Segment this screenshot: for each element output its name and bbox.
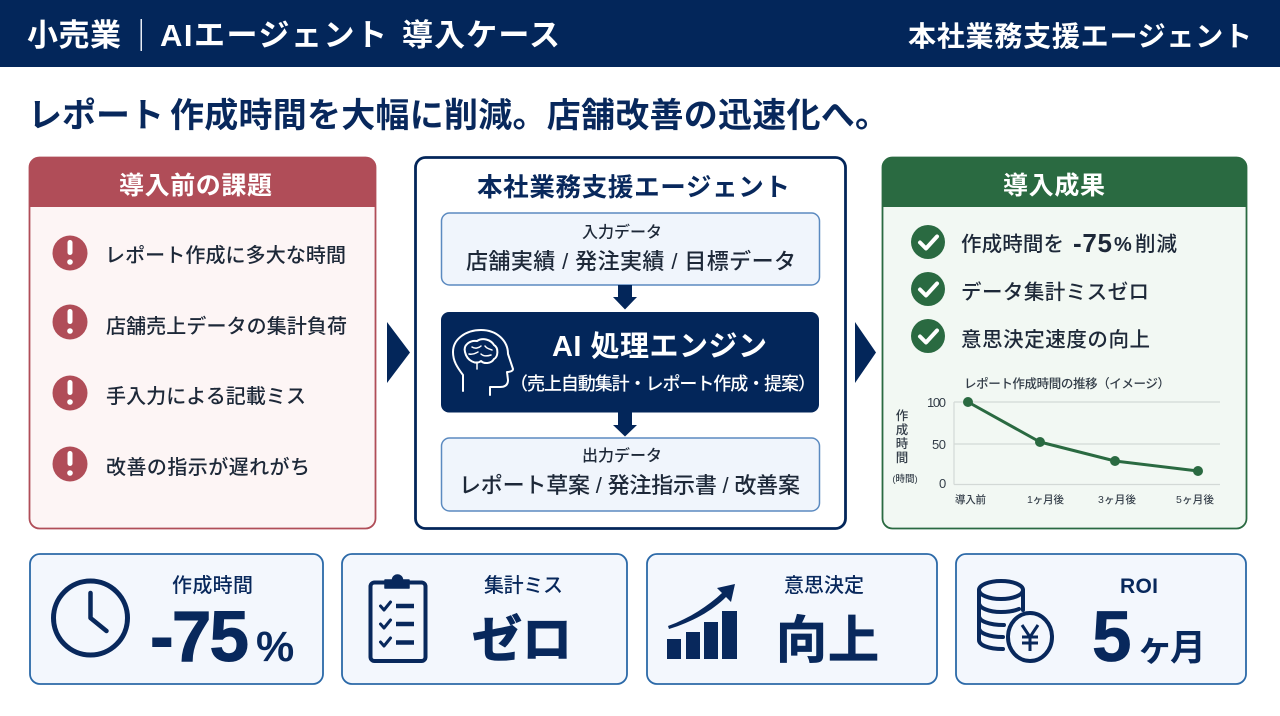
KPI value: -75 bbox=[150, 598, 249, 677]
panel: results bbox=[882, 157, 1247, 528]
KPI label: 意思決定 bbox=[784, 574, 864, 597]
KPI card: time bbox=[30, 554, 323, 684]
icon: clipboard checklist bbox=[370, 575, 426, 661]
engine title: AI 処理エンジン bbox=[552, 330, 767, 363]
input data box bbox=[442, 213, 820, 285]
challenge item 4 bbox=[52, 446, 310, 482]
result item 3: 意思決定速度の向上 bbox=[961, 328, 1150, 352]
panel: agent flow bbox=[416, 158, 846, 528]
challenge item 3 bbox=[52, 376, 306, 410]
output data box bbox=[442, 438, 820, 511]
arrow: engine to output bbox=[613, 412, 637, 436]
header title: 導入ケース bbox=[402, 18, 560, 53]
data line bbox=[963, 397, 1203, 476]
icon: head with brain bbox=[453, 330, 513, 395]
challenge item 3: 手入力による記載ミス bbox=[106, 385, 306, 408]
challenge item 2: 店舗売上データの集計負荷 bbox=[106, 314, 347, 338]
output data box: 出力データ bbox=[582, 446, 662, 465]
y axis labels: 間 bbox=[896, 451, 908, 465]
input data box: 入力データ bbox=[582, 222, 662, 242]
y axis labels: 100 bbox=[927, 395, 946, 410]
x axis labels: 導入前 bbox=[955, 493, 986, 506]
icon: clock bbox=[54, 581, 128, 655]
KPI value: ヶ月 bbox=[1137, 627, 1206, 668]
header title: AIエージェント bbox=[160, 18, 387, 53]
result item 1: -75 bbox=[1073, 228, 1112, 258]
KPI value: % bbox=[256, 623, 294, 671]
KPI label: 作成時間 bbox=[172, 574, 253, 597]
AI engine box bbox=[441, 312, 819, 412]
y axis labels: 50 bbox=[932, 437, 946, 452]
header title: 小売業 bbox=[27, 18, 121, 53]
y axis labels: 時 bbox=[896, 436, 909, 451]
result item 1: % bbox=[1114, 234, 1132, 256]
panel heading: agent: 本社業務支援エージェント bbox=[477, 174, 790, 202]
header bar bbox=[0, 0, 1280, 67]
header agent name: 本社業務支援エージェント bbox=[908, 21, 1252, 52]
y axis labels: 0 bbox=[939, 476, 946, 491]
x axis labels: 5ヶ月後 bbox=[1176, 493, 1214, 506]
y axis labels bbox=[892, 395, 946, 491]
panel heading: before: 導入前の課題 bbox=[119, 172, 272, 200]
result item 1: 削減 bbox=[1135, 233, 1178, 256]
x axis labels: 1ヶ月後 bbox=[1027, 493, 1064, 506]
result item 1 bbox=[911, 225, 1178, 259]
KPI card: errors bbox=[342, 554, 627, 684]
main heading: 作成時間を大幅に削減。店舗改善の迅速化へ。 bbox=[170, 97, 889, 135]
KPI value bbox=[150, 598, 294, 677]
output data box: レポート草案 / 発注指示書 / 改善案 bbox=[459, 473, 800, 498]
y axis labels: 成 bbox=[896, 422, 909, 437]
x axis labels bbox=[955, 493, 1214, 506]
arrow: input to engine bbox=[613, 285, 637, 310]
KPI value bbox=[1092, 598, 1206, 677]
panel: before challenges bbox=[29, 157, 376, 528]
challenge item 1 bbox=[52, 236, 346, 270]
result item 2 bbox=[911, 272, 1149, 306]
challenge item 2 bbox=[52, 304, 347, 340]
arrow: before to agent bbox=[387, 322, 410, 383]
engine description: （売上自動集計・レポート作成・提案） bbox=[510, 374, 816, 394]
arrow: agent to results bbox=[855, 322, 876, 383]
y axis labels: 作 bbox=[896, 409, 909, 423]
icon: rising bar chart bbox=[667, 584, 737, 659]
result item 1: 作成時間を bbox=[961, 233, 1064, 256]
KPI value: 5 bbox=[1092, 598, 1132, 677]
challenge item 1: レポート作成に多大な時間 bbox=[105, 244, 346, 267]
result item 2: データ集計ミスゼロ bbox=[961, 280, 1149, 304]
challenge item 4: 改善の指示が遅れがち bbox=[106, 456, 310, 479]
x axis labels: 3ヶ月後 bbox=[1098, 493, 1136, 506]
icon: coins with yen bbox=[979, 581, 1052, 661]
KPI label: ROI bbox=[1120, 575, 1158, 598]
KPI card: decisions bbox=[647, 554, 937, 684]
panel heading: results: 導入成果 bbox=[1003, 172, 1105, 200]
y axis labels: (時間) bbox=[892, 473, 918, 485]
header title bbox=[27, 18, 560, 53]
KPI value: ゼロ bbox=[472, 612, 572, 668]
chart title: レポート作成時間の推移（イメージ） bbox=[964, 376, 1170, 391]
input data box: 店舗実績 / 発注実績 / 目標データ bbox=[466, 249, 796, 274]
KPI value: 向上 bbox=[776, 612, 879, 669]
result item 3 bbox=[911, 319, 1150, 353]
KPI card: ROI bbox=[956, 554, 1246, 684]
main heading: レポート bbox=[28, 97, 164, 135]
KPI label: 集計ミス bbox=[484, 574, 563, 597]
line chart: report time trend bbox=[892, 376, 1220, 506]
